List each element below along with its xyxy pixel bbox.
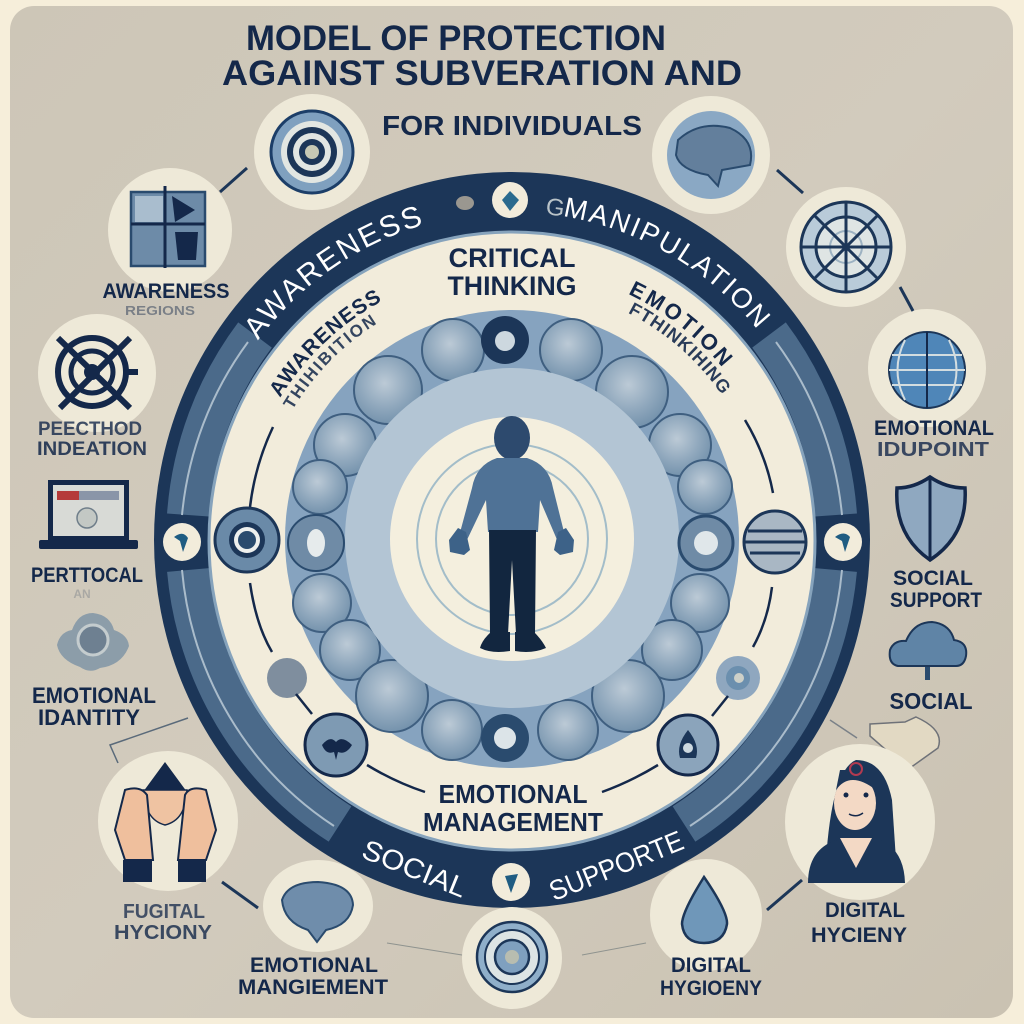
inner ring labels: MANAGEMENT xyxy=(423,807,603,837)
icon: woman portrait with label: DIGITAL xyxy=(825,899,905,922)
ring arcs xyxy=(250,420,773,792)
icon: box with label xyxy=(102,168,232,318)
ring nodes xyxy=(163,182,862,901)
icon: globe with label xyxy=(868,309,994,461)
inner ring labels: FTHINKIHING xyxy=(628,302,730,393)
icon: shield with label xyxy=(890,477,982,612)
title: MODEL OF PROTECTION xyxy=(246,19,666,58)
outer navy ring xyxy=(154,172,870,908)
icon: hand xyxy=(870,717,939,768)
icon: identity badge with label xyxy=(32,613,156,730)
icon: woman portrait with label xyxy=(785,744,935,947)
inner ring labels: THIHIBITION xyxy=(282,314,376,407)
inner ring labels: AWARENESS xyxy=(271,290,380,398)
icon: crossed target with label xyxy=(37,314,156,460)
title: AGAINST SUBVERATION AND xyxy=(222,54,742,93)
outer ring labels: SOCIAL xyxy=(358,834,471,904)
icon: globe with label: IDUPOINT xyxy=(877,439,989,461)
icon: laptop with label: PERTTOCAL xyxy=(31,564,143,587)
icon: hands with label xyxy=(98,751,238,944)
icon: crossed target with label: INDEATION xyxy=(37,439,147,460)
inner blue ring xyxy=(345,368,679,708)
icon: shield with label: SUPPORT xyxy=(890,589,982,612)
icon: brain top right xyxy=(652,96,770,214)
icon: crossed target with label: PEECTHOD xyxy=(38,419,142,440)
concentric lines xyxy=(417,444,607,634)
title: FOR INDIVIDUALS xyxy=(382,110,642,141)
inset guide lines xyxy=(182,342,842,826)
icon: laptop with label: AN xyxy=(73,587,91,601)
central ring diagram xyxy=(154,172,870,908)
lighter ring insets xyxy=(188,335,836,824)
icon: brain bottom with label xyxy=(238,860,388,999)
outer ring labels: SUPPORTE xyxy=(545,825,688,907)
icon: laptop with label xyxy=(31,480,143,601)
icon: globe with label: EMOTIONAL xyxy=(874,417,994,440)
connector arrows xyxy=(110,168,913,955)
inner ring labels: EMOTION xyxy=(629,281,733,366)
icon: water drop with label: HYGIOENY xyxy=(660,977,762,1000)
icon: web target xyxy=(786,187,906,307)
icon: cloud with label xyxy=(890,622,972,714)
inner ring labels xyxy=(225,218,780,876)
inner cream disc xyxy=(390,417,634,661)
outer ring labels: G xyxy=(544,193,566,223)
blue bead ring background xyxy=(285,310,739,768)
inner cream ring xyxy=(209,232,815,850)
inner ring labels: THINKING xyxy=(448,271,576,301)
icon: spiral target top xyxy=(254,94,370,210)
icon: woman portrait with label: HYCIENY xyxy=(811,924,907,947)
icon: brain bottom with label: EMOTIONAL xyxy=(250,954,378,977)
outer ring labels: AWARENESS xyxy=(247,206,421,340)
icon: bottom spiral xyxy=(462,907,562,1009)
title xyxy=(222,19,742,141)
beads xyxy=(293,319,732,760)
icon: brain bottom with label: MANGIEMENT xyxy=(238,976,388,999)
icon: shield with label: SOCIAL xyxy=(893,567,973,590)
icon: water drop with label: DIGITAL xyxy=(671,954,751,977)
icon: identity badge with label: EMOTIONAL xyxy=(32,683,156,708)
icon: cloud with label: SOCIAL xyxy=(890,688,972,714)
inner ring labels: CRITICAL xyxy=(448,243,576,273)
icon: water drop with label xyxy=(650,859,762,1000)
icon: hands with label: HYCIONY xyxy=(114,922,213,944)
outer ring labels: MANIPULATION xyxy=(564,198,770,328)
outer ring labels xyxy=(223,153,818,947)
icon: identity badge with label: IDANTITY xyxy=(38,705,140,730)
icon: box with label: REGIONS xyxy=(125,303,195,318)
person figure xyxy=(449,416,574,652)
icon: box with label: AWARENESS xyxy=(102,280,230,303)
inner ring labels: EMOTIONAL xyxy=(438,779,588,809)
icon: hands with label: FUGITAL xyxy=(123,901,205,923)
